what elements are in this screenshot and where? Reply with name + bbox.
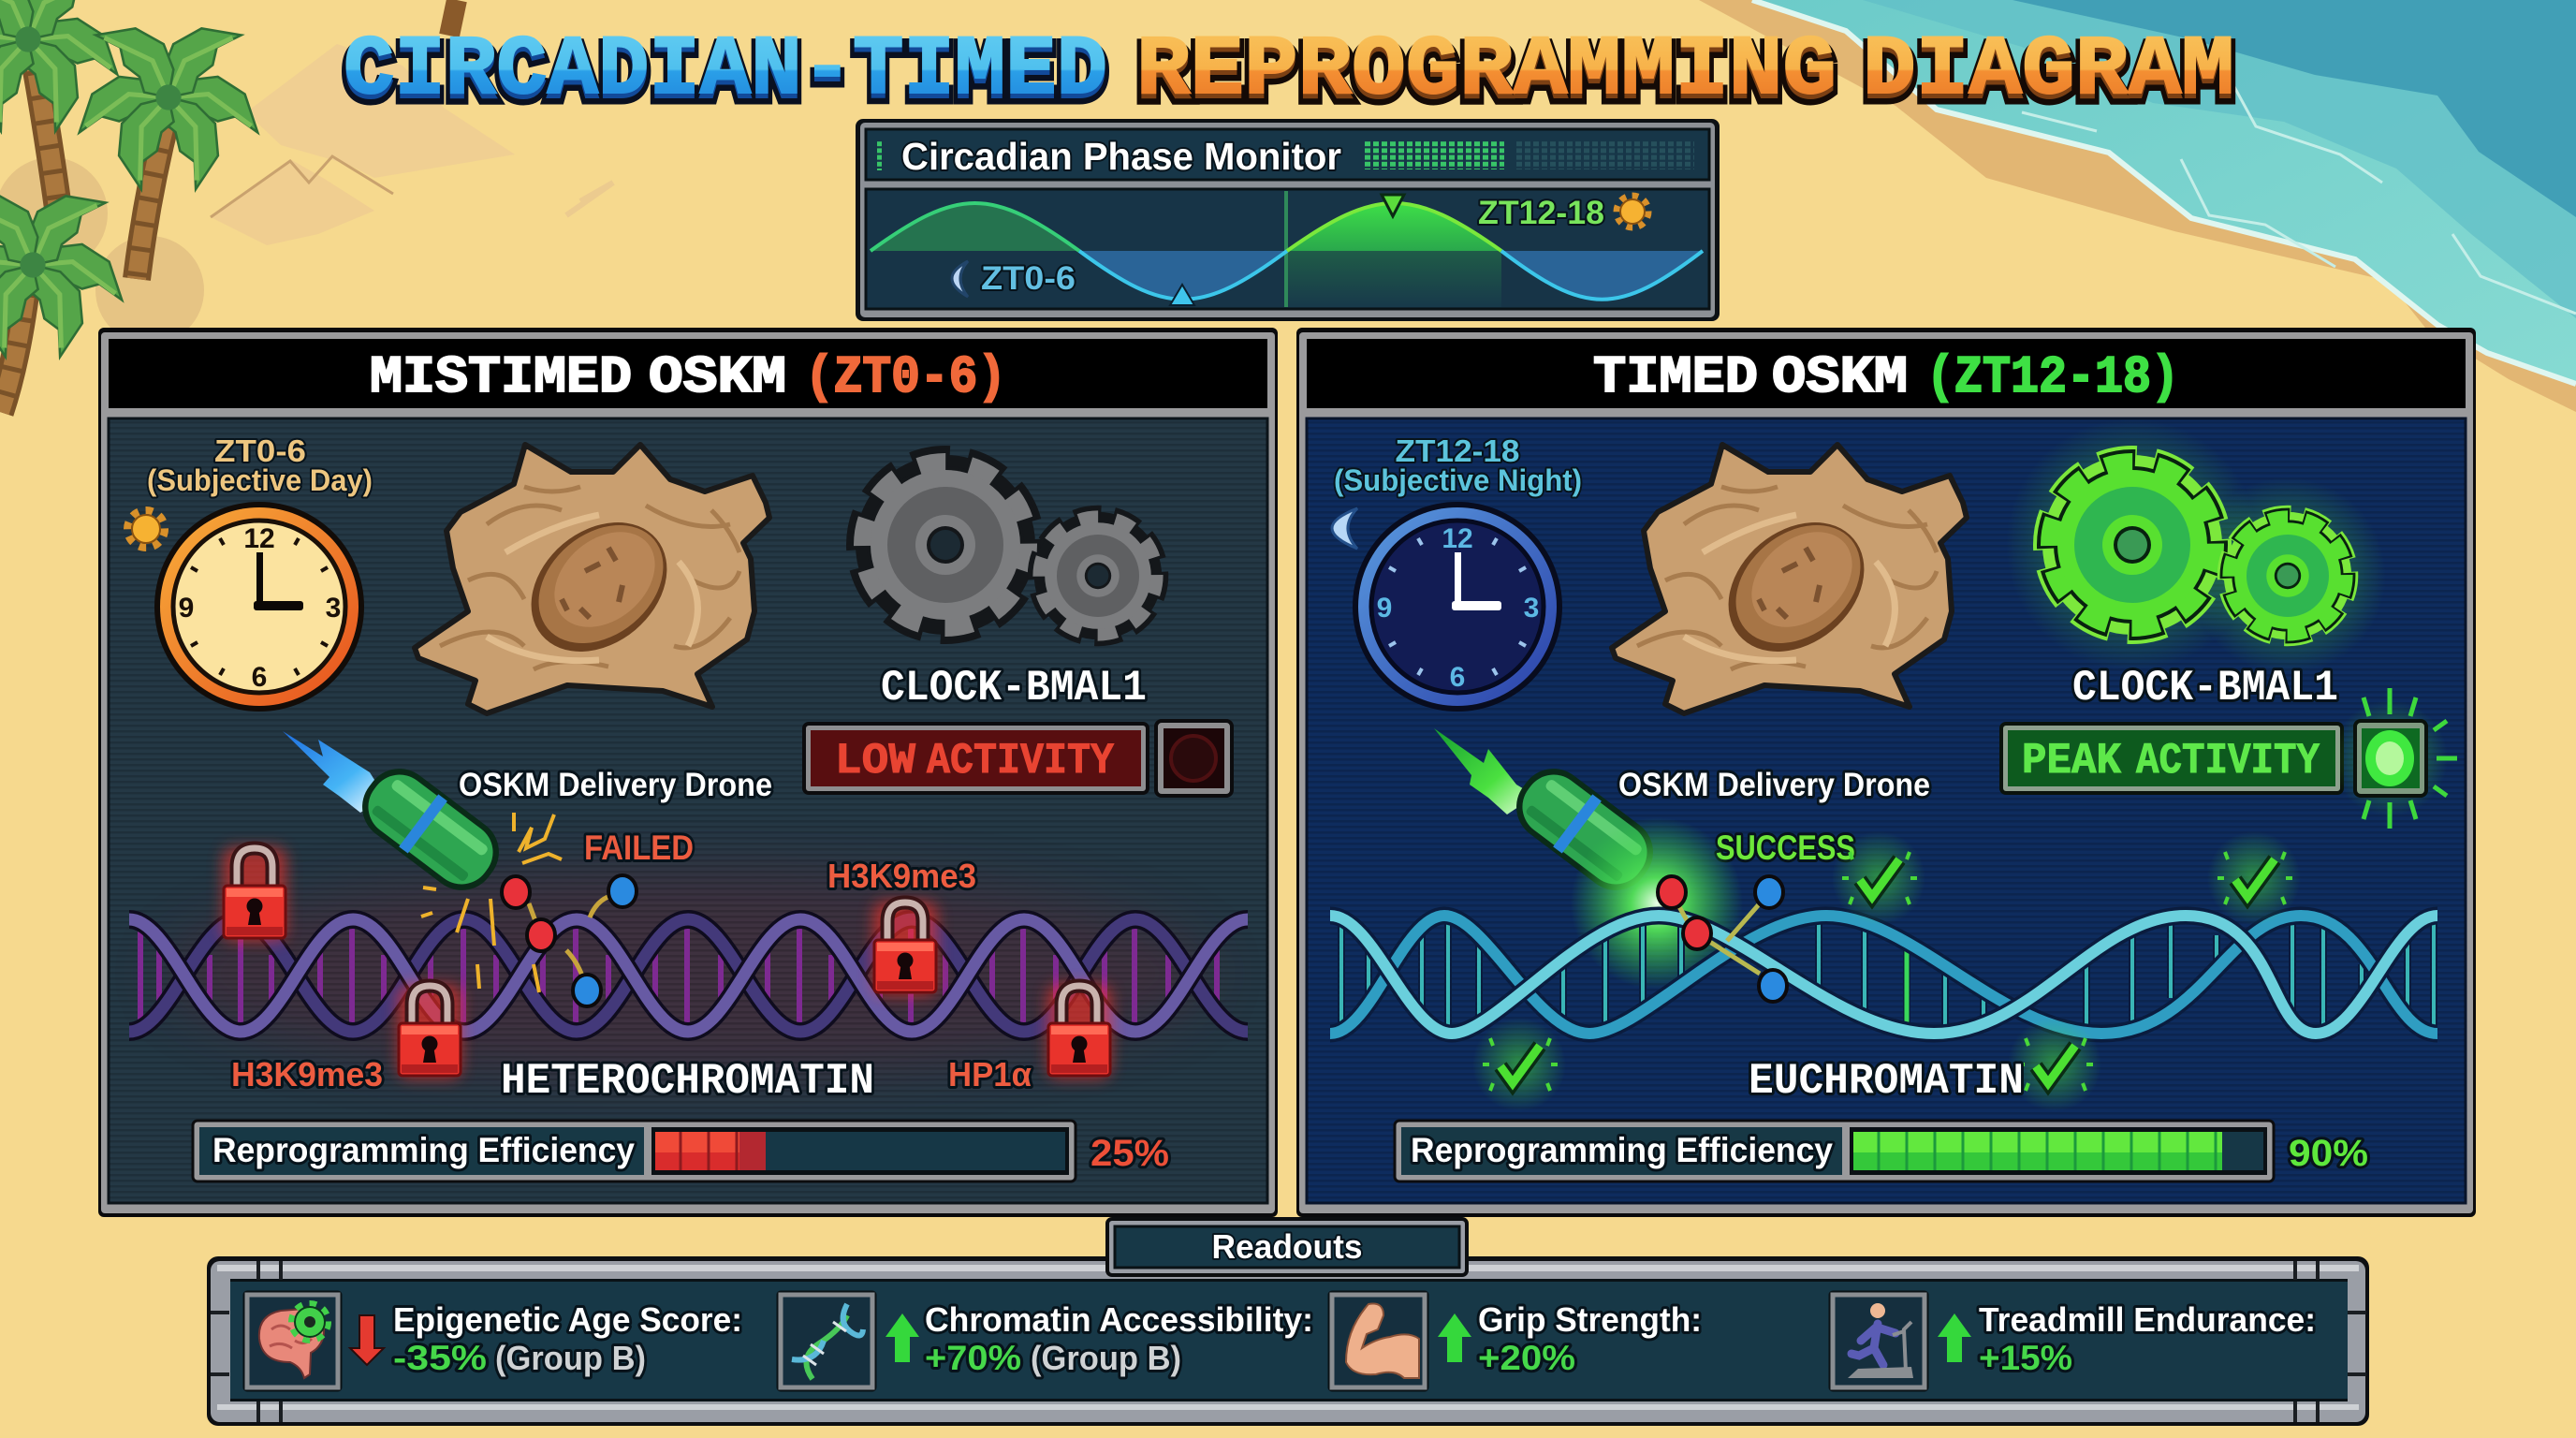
drone: flame [283,731,386,813]
value: 25%: 25% [1090,1133,1169,1174]
cell [1612,445,1967,713]
title part: orange: REPROGRAMMING [1136,23,1837,119]
check 4 [2008,1018,2101,1111]
label: Chromatin Accessibility: [925,1300,1313,1339]
wet sand band along the shore [1699,0,2576,412]
panel heading: OSKM [1772,347,1908,407]
clock caption: (Subjective Night) [1334,463,1582,497]
status lamp: off [1156,721,1232,796]
check 3 [1472,1018,1566,1111]
shallow water [1752,0,2576,384]
clock: night: 6 [1450,662,1465,693]
clock: daytime: 6 [252,662,267,693]
title part: orange: DIAGRAM [1863,30,2234,125]
gears: inactive [863,462,1156,634]
drone capsule [349,756,512,903]
readouts tab: Readouts [1211,1227,1363,1266]
panel heading: OSKM [649,347,786,407]
monitor chart background [866,189,1709,309]
clock: night [1353,502,1562,712]
clock: night: 12 [1442,523,1473,554]
label: H3K9me3 lower: H3K9me3 [231,1055,383,1093]
check 1 [1832,831,1925,925]
arrow: up [1438,1313,1471,1362]
molecules: blocked [502,875,637,1006]
check 2 [2207,831,2301,925]
drone capsule [1503,756,1666,903]
foam lines [1752,0,2576,384]
value: 90%: 90% [2289,1133,2368,1174]
panel heading [1593,347,2179,407]
panel: timed OSKM [1296,328,2476,1217]
title part: orange: DIAGRAM [1863,23,2234,119]
status: peak activity [2001,724,2342,793]
clock: daytime: 9 [179,593,194,624]
clock caption [147,433,373,497]
efficiency bar [1395,1121,2274,1181]
DNA helix: euchromatin [1330,916,2437,1034]
label: HP1a: HP1α [948,1055,1032,1093]
value: (Group B) [495,1339,646,1377]
clock: night: 9 [1377,593,1392,624]
title part: orange [1136,23,2234,125]
arrow: up [886,1313,919,1362]
panel heading: (ZT0-6) [805,347,1006,407]
panel heading: (ZT12-18) [1926,347,2179,407]
label: drone: OSKM Delivery Drone [459,767,772,803]
marker: trough [1170,285,1194,305]
icon: DNA [778,1292,875,1390]
status: low activity [804,724,1148,793]
label: H3K9me3 upper: H3K9me3 [827,857,976,895]
label: success: SUCCESS [1716,829,1855,867]
label: failed: FAILED [584,829,694,867]
arrow: down [350,1315,384,1365]
lock 2 [398,985,461,1078]
icon: brain with gear [244,1292,341,1390]
title part: orange: REPROGRAMMING [1136,28,1837,124]
wave chart [871,191,1703,307]
clock caption: ZT12-18 [1395,433,1520,468]
label: euchromatin: EUCHROMATIN [1749,1057,2024,1106]
small status dots [877,140,885,170]
icon: sun [1617,196,1648,227]
clock caption: (Subjective Day) [147,463,373,497]
readout: grip strength [1329,1292,1702,1390]
panel heading: TIMED [1593,347,1758,407]
clock: daytime: 3 [326,593,341,624]
signal bar [1364,141,1694,169]
palm shadows on sand [0,157,204,345]
foam ripples [2022,75,2576,314]
label: CLOCK-BMAL1: CLOCK-BMAL1 [881,664,1147,712]
drone: flame [1434,728,1535,814]
sparks: failed delivery [421,813,562,992]
delivery glow [1571,817,1743,990]
sand dune drawing [211,44,613,245]
clock: daytime: 12 [243,523,275,554]
clock caption [1334,433,1582,497]
readout: epigenetic age [244,1292,742,1390]
label: ZT0-6: ZT0-6 [981,260,1076,297]
status lamp: on [2332,688,2457,829]
value: +15% [1979,1339,2072,1377]
readout: treadmill endurance [1830,1292,2316,1390]
value [925,1339,1181,1377]
bar fill: 25% [655,1132,766,1170]
palm tree 2 [80,9,257,279]
title part: blue: CIRCADIAN-TIMED [344,30,1107,125]
value: -35% [393,1339,487,1377]
panel heading: MISTIMED [370,347,632,407]
label: Epigenetic Age Score: [393,1300,742,1339]
clock caption: ZT0-6 [214,433,306,468]
lock 3 [873,902,937,995]
label: ZT12-18: ZT12-18 [1478,195,1604,231]
lock 1 [223,847,286,941]
clock: daytime [154,502,364,712]
efficiency bar: Reprogramming Efficiency [1411,1131,1833,1169]
icon: moon [952,261,968,297]
palm tree 1 [0,0,117,208]
arrow: up [1938,1313,1971,1362]
title [344,23,2234,125]
DNA helix: heterochromatin [129,919,1248,1032]
lock 4 [1047,985,1111,1078]
icon: sun [127,510,165,548]
value: +20% [1478,1339,1575,1377]
label: CLOCK-BMAL1: CLOCK-BMAL1 [2072,664,2338,712]
palm trunk at top edge [449,0,457,36]
deep water [2012,0,2576,217]
readout: chromatin accessibility [778,1292,1313,1390]
efficiency bar [193,1121,1076,1181]
value: +70% [925,1339,1021,1377]
label: heterochromatin: HETEROCHROMATIN [501,1057,874,1106]
monitor heading: Circadian Phase Monitor [901,135,1341,178]
gears: active [2006,418,2386,674]
mid water [1863,0,2576,318]
efficiency bar: Reprogramming Efficiency [212,1131,635,1169]
value: (Group B) [1031,1339,1181,1377]
status: peak activity: PEAK [2022,737,2121,785]
title part: blue: CIRCADIAN-TIMED [344,28,1107,124]
icon: moon [1332,508,1357,549]
bar fill: 90% [1853,1132,2222,1170]
panel frame [1296,328,2476,1217]
value [393,1339,646,1377]
title part: orange: DIAGRAM [1863,28,2234,124]
marker: peak [1382,195,1404,216]
title part: blue: CIRCADIAN-TIMED [344,23,1107,119]
readouts frame [207,1256,2369,1426]
status: peak activity: ACTIVITY [2136,737,2320,785]
clock: night: 3 [1524,593,1539,624]
cell [415,445,769,713]
icon: flexed arm [1329,1292,1427,1390]
panel frame [98,328,1278,1217]
molecules: delivered [1658,876,1787,1002]
icon: runner on treadmill [1830,1292,1927,1390]
panel heading [370,347,1006,407]
readouts tab [1107,1219,1467,1275]
title part: orange: REPROGRAMMING [1136,30,1837,125]
label: Treadmill Endurance: [1979,1300,2316,1339]
status: low activity: LOW [835,737,915,785]
panel: readouts [207,1219,2369,1426]
panel: mistimed OSKM [98,328,1278,1217]
panel: circadian phase monitor [856,119,1720,321]
label: Grip Strength: [1478,1300,1702,1339]
label: drone: OSKM Delivery Drone [1618,767,1930,803]
palm tree 3 [0,177,122,412]
status: low activity: ACTIVITY [927,737,1114,785]
